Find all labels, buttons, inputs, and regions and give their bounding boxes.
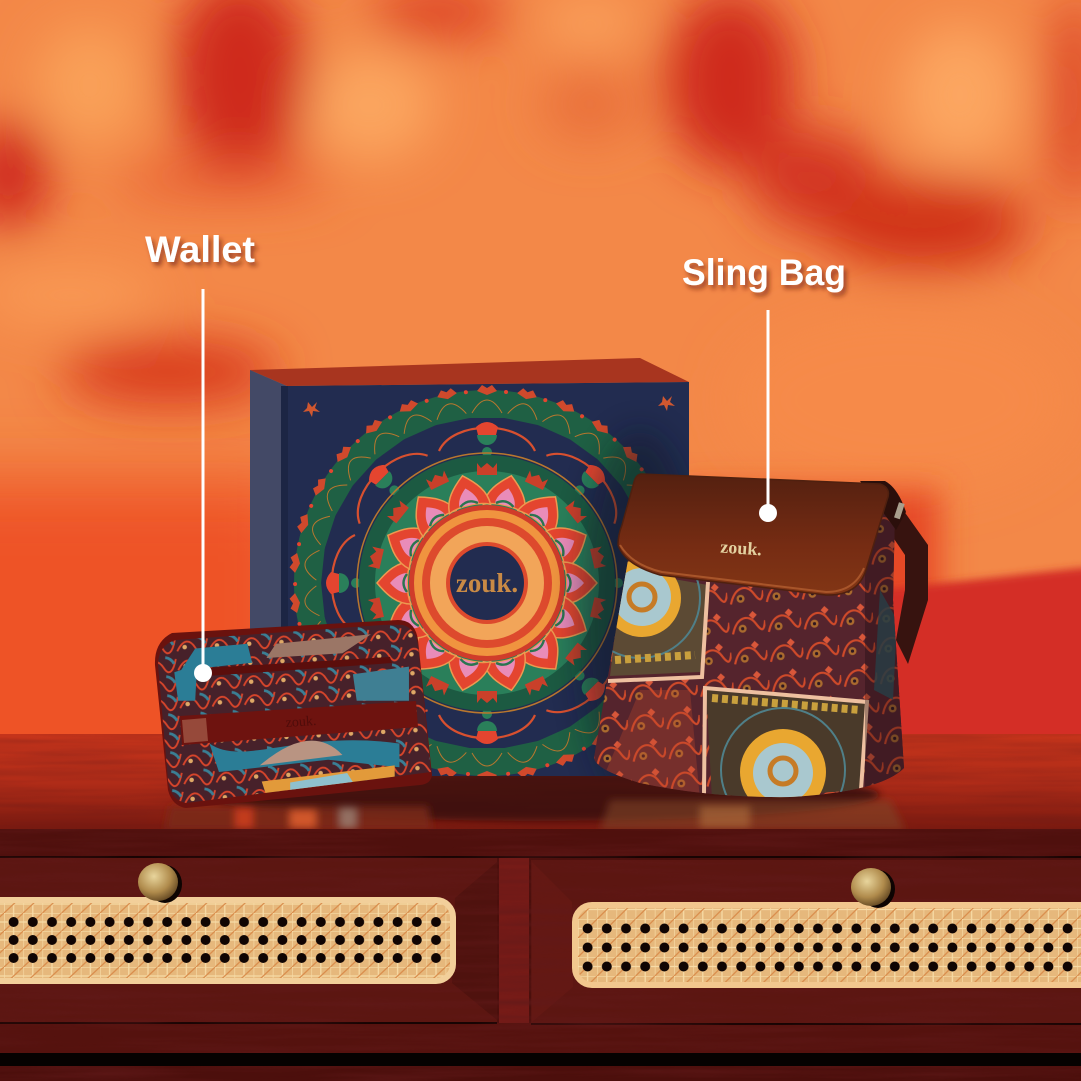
arch ring xyxy=(326,422,648,744)
upper left mandala panel xyxy=(610,561,706,676)
table front and drawers xyxy=(0,829,1081,1081)
lower right orange-red wall near bag xyxy=(680,490,940,750)
dark gap xyxy=(0,1053,1081,1066)
label: Sling Bag xyxy=(682,252,846,522)
box front xyxy=(288,382,689,776)
shadow band on right wall xyxy=(880,568,1081,760)
wallet leather border xyxy=(155,620,432,808)
shadow from bag on box xyxy=(580,430,700,810)
flap highlight xyxy=(620,545,864,592)
vine ring xyxy=(357,453,617,713)
centre post xyxy=(499,858,529,1023)
cream panel borders xyxy=(608,582,708,681)
right drawer xyxy=(531,860,1081,1024)
box lid top xyxy=(250,358,689,386)
wallet zipper pocket xyxy=(205,657,392,676)
reflection of products xyxy=(165,800,905,830)
left brass knob xyxy=(138,863,182,903)
box side xyxy=(250,370,287,640)
left cane panel xyxy=(0,900,453,981)
petal ring xyxy=(377,471,597,695)
green disc xyxy=(359,455,615,711)
mandala artwork xyxy=(290,385,685,776)
lotus ring xyxy=(368,463,606,703)
label: Sling Bag: Sling Bag xyxy=(682,252,846,293)
leather flap xyxy=(618,474,888,595)
lower mandala panel xyxy=(707,690,868,798)
wallet leather strap xyxy=(180,701,418,745)
sling bag xyxy=(594,473,928,798)
top rail xyxy=(0,829,1081,857)
outer scalloped ring xyxy=(290,385,646,776)
corner ornaments xyxy=(303,396,675,417)
lower left red-orange wall xyxy=(0,480,300,810)
bag strap xyxy=(888,500,928,664)
gift box xyxy=(250,358,700,810)
teal side panel xyxy=(874,590,897,700)
right cane panel xyxy=(575,905,1081,985)
table top surface xyxy=(0,734,1081,831)
base rail xyxy=(0,1066,1081,1081)
zip edge xyxy=(860,481,906,530)
metal buckle xyxy=(894,502,905,519)
box logo: zouk. xyxy=(456,568,518,598)
label: Wallet: Wallet xyxy=(145,229,255,270)
bag body xyxy=(594,510,904,797)
central rings xyxy=(409,505,565,661)
wallet fabric xyxy=(157,625,433,805)
background: blurred orange and red wall xyxy=(0,0,1081,810)
wallet embossed logo: zouk. xyxy=(285,714,317,731)
right brass knob xyxy=(851,868,895,908)
wallet xyxy=(155,620,433,808)
bag logo: zouk. xyxy=(720,537,763,559)
label: Wallet xyxy=(145,229,255,682)
left drawer xyxy=(0,858,497,1023)
lower rail xyxy=(0,1023,1081,1053)
